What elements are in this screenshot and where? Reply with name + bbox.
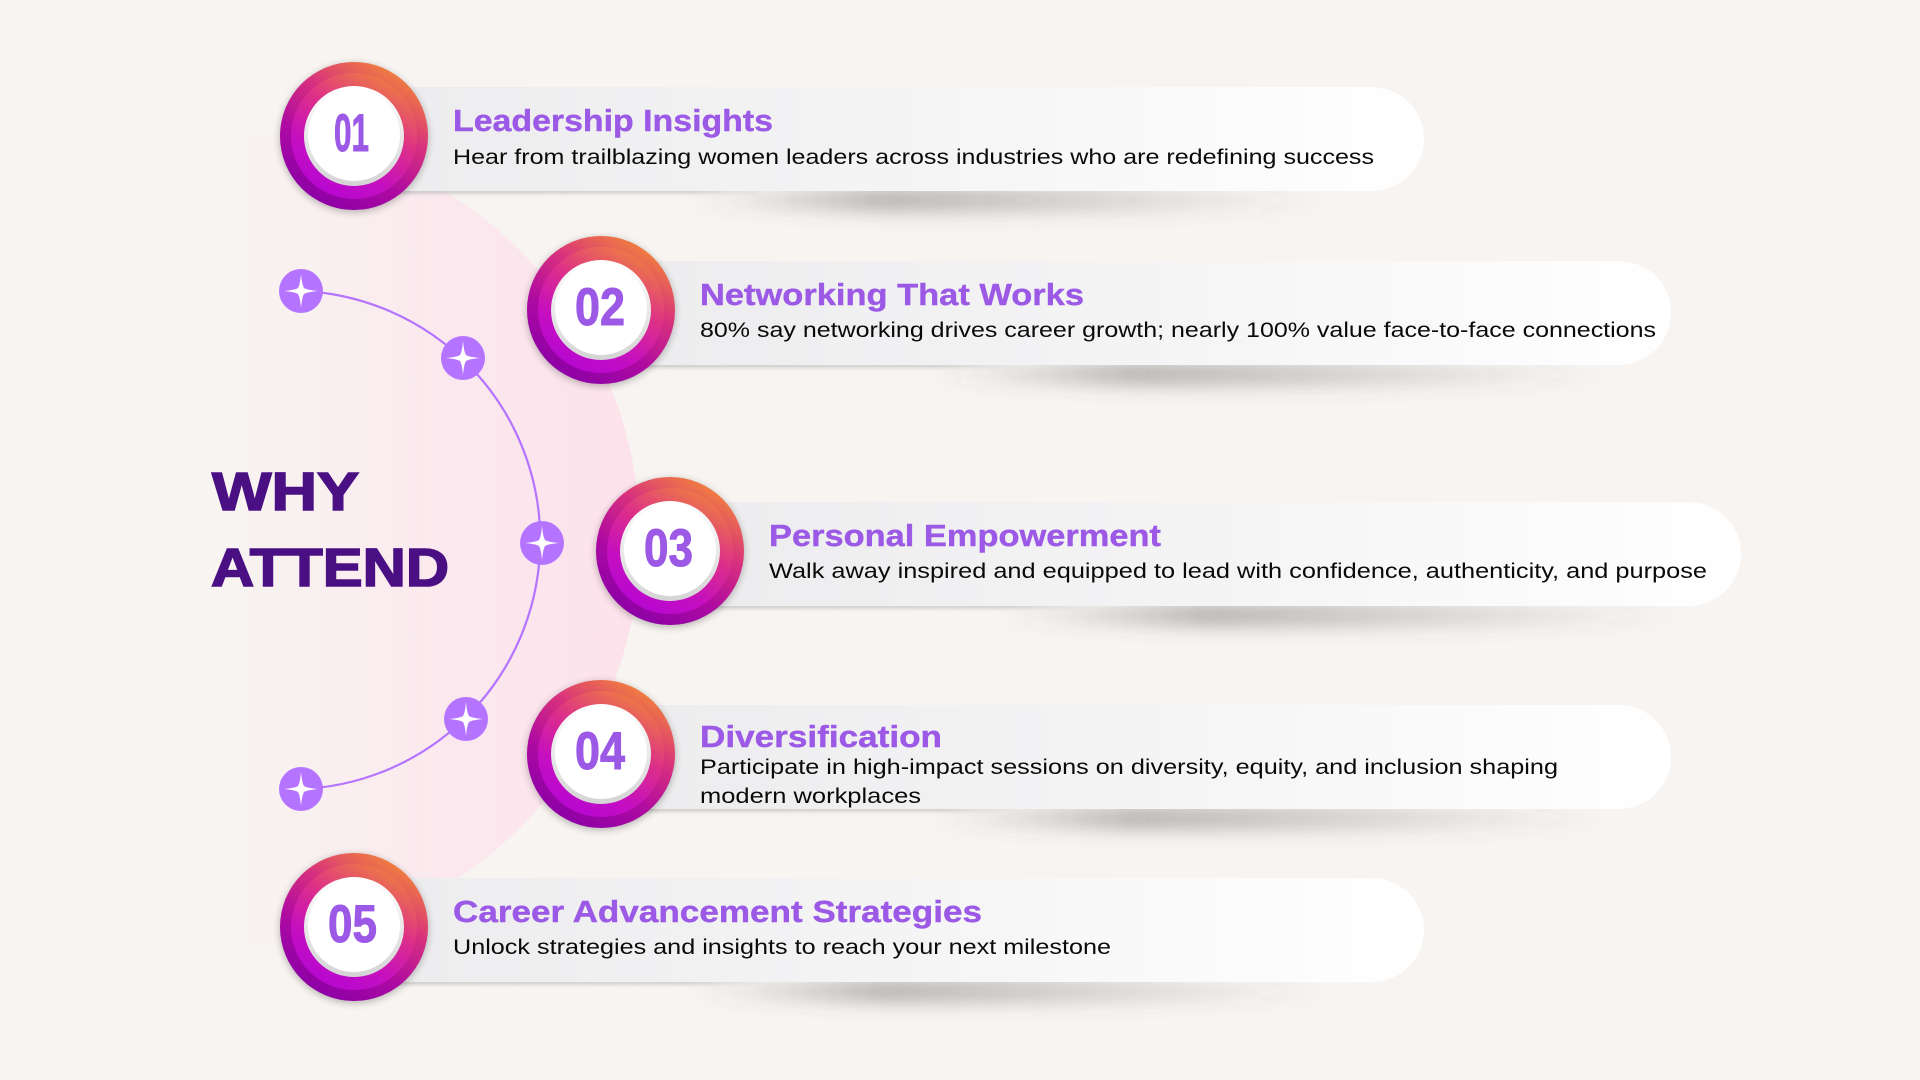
- number badge: 05: [328, 895, 377, 954]
- heading: Networking That Works: [700, 277, 1084, 312]
- pink semicircle backdrop: [0, 132, 640, 946]
- description: Unlock strategies and insights to reach your next milestone: [453, 936, 1111, 959]
- pill: [670, 502, 1741, 606]
- pill shadow: [640, 806, 1610, 830]
- timeline arc with nodes: [279, 269, 564, 811]
- number badge: 02: [575, 278, 625, 337]
- item 03: personal empowerment: [596, 477, 1741, 627]
- description: modern workplaces: [700, 785, 921, 808]
- description: Hear from trailblazing women leaders across industries who are redefining success: [453, 146, 1374, 169]
- item 04: diversification: [527, 680, 1671, 830]
- node 4: [444, 697, 488, 741]
- pill: [601, 705, 1671, 809]
- heading: Personal Empowerment: [769, 518, 1161, 553]
- node 2: [441, 336, 485, 380]
- number badge: 01: [334, 104, 369, 163]
- description: [700, 756, 1558, 808]
- number badge: 03: [644, 519, 693, 578]
- pill: [601, 261, 1671, 365]
- item 01: leadership insights: [280, 62, 1424, 212]
- description: Participate in high-impact sessions on diversity, equity, and inclusion shaping: [700, 756, 1558, 779]
- heading: Leadership Insights: [453, 103, 773, 138]
- node 1: [279, 269, 323, 313]
- pill shadow: [640, 362, 1610, 386]
- pill shadow: [390, 188, 1330, 212]
- number badge: [280, 853, 428, 1003]
- heading: Diversification: [700, 719, 942, 754]
- item 02: networking that works: [527, 236, 1671, 386]
- pill shadow: [390, 979, 1330, 1003]
- title: why attend: WHY: [212, 462, 359, 522]
- number badge: [596, 477, 744, 627]
- number badge: [527, 680, 675, 830]
- pill: [354, 878, 1424, 982]
- node 5: [279, 767, 323, 811]
- description: Walk away inspired and equipped to lead with confidence, authenticity, and purpose: [769, 560, 1707, 583]
- description: 80% say networking drives career growth; nearly 100% value face-to-face connections: [700, 319, 1656, 342]
- number badge: 04: [575, 722, 625, 781]
- number badge: [280, 62, 428, 212]
- pill: [354, 87, 1424, 191]
- pill shadow: [710, 603, 1680, 627]
- item 05: career advancement strategies: [280, 853, 1424, 1003]
- node 3: [520, 521, 564, 565]
- number badge: [527, 236, 675, 386]
- title: why attend: ATTEND: [211, 538, 449, 598]
- title: why attend: [211, 462, 449, 598]
- heading: Career Advancement Strategies: [453, 894, 982, 929]
